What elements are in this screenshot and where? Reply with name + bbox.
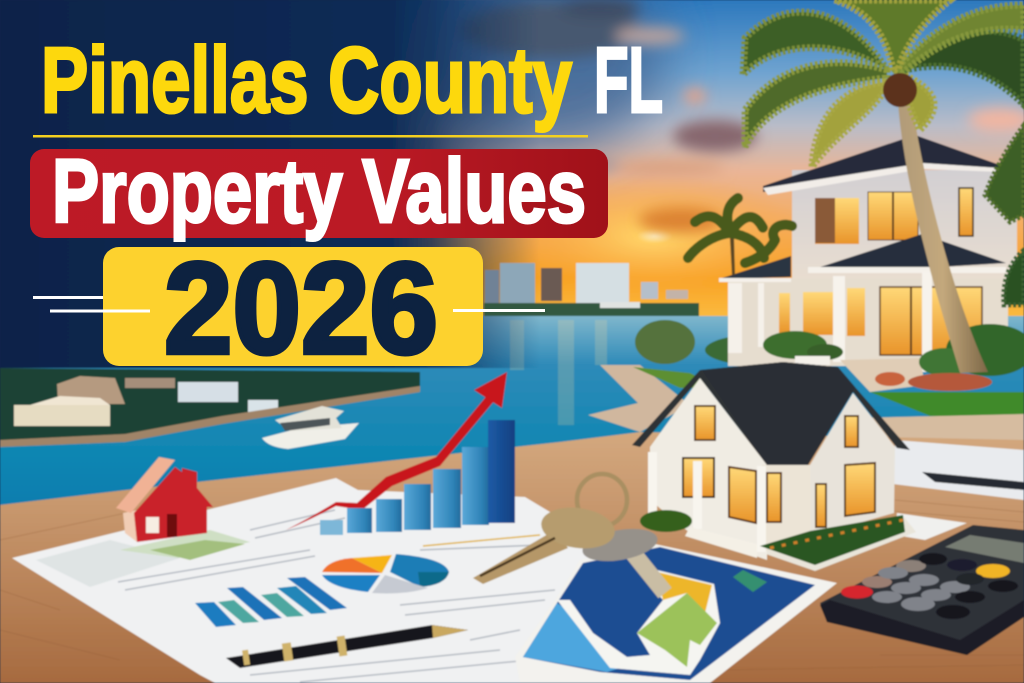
background: sunset sky — [0, 0, 1024, 330]
palm tree: right — [743, 0, 1024, 373]
pie chart — [322, 554, 449, 593]
calculator — [820, 525, 1024, 655]
document text lines — [118, 510, 555, 682]
water — [0, 316, 1024, 511]
speed lines — [33, 296, 545, 312]
document bar chart — [195, 577, 347, 627]
title: Pinellas County FL: Pinellas County — [41, 28, 572, 132]
table right paper — [893, 440, 1024, 500]
clouds — [460, 0, 1024, 233]
pen top right — [922, 472, 1024, 490]
left shoreline with houses — [0, 368, 420, 447]
map of Florida — [515, 543, 837, 683]
palm fronds — [743, 0, 1024, 167]
calculator keys — [872, 553, 1018, 619]
title: Pinellas County FL: FL — [594, 28, 663, 132]
skyline — [484, 263, 699, 316]
badge: 2026: 2026 — [164, 235, 438, 381]
banner: Property Values: Property Values — [52, 142, 586, 242]
keys — [473, 474, 665, 593]
chart: blue bars with rising arrow — [286, 372, 515, 535]
divider line — [33, 135, 588, 138]
pen — [226, 625, 468, 668]
boat — [262, 406, 359, 449]
small model house — [632, 362, 916, 571]
palm right edge — [985, 125, 1024, 305]
small palms — [688, 198, 792, 275]
dusk shading behind title — [415, 0, 665, 155]
documents — [12, 478, 640, 683]
wooden table — [0, 432, 1024, 683]
navy left overlay — [0, 0, 540, 368]
wood grain — [0, 500, 1024, 670]
water reflections — [510, 320, 607, 425]
large waterfront house — [719, 135, 1024, 392]
icon: red model house — [116, 457, 213, 542]
table paper under calculator — [895, 513, 967, 540]
sun glow — [505, 174, 805, 298]
promenade and lawn right — [588, 320, 1024, 440]
